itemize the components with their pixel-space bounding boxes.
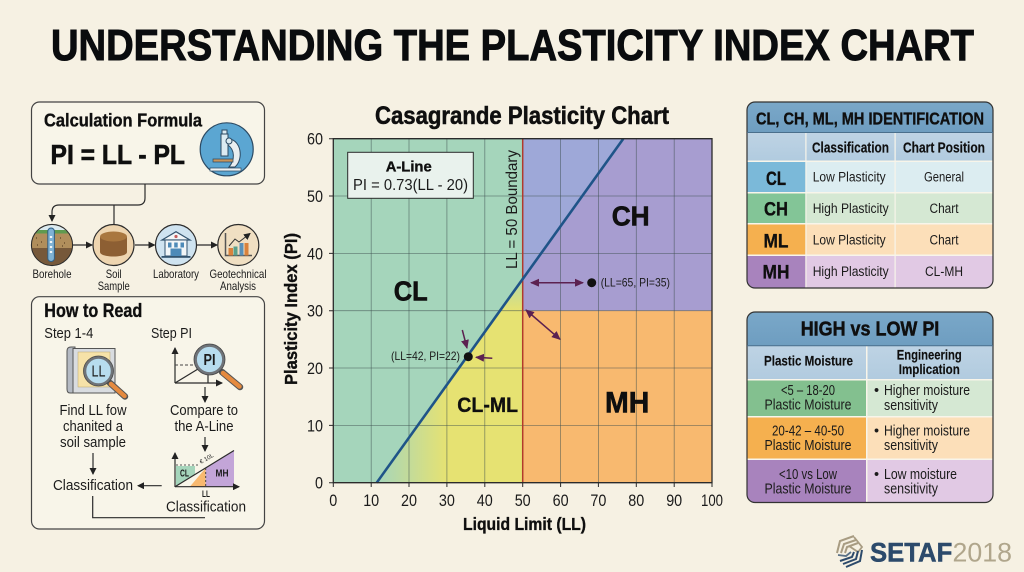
region: CH — [523, 139, 712, 311]
row labels: Plastic Moisture — [764, 481, 852, 497]
text: compare to the A-line — [170, 403, 238, 435]
row labels: 20-42 – 40-50 — [772, 424, 844, 440]
row values — [813, 170, 964, 279]
x axis ticks: 20 — [401, 492, 417, 510]
mini classification chart: CL — [180, 468, 189, 480]
mini classification chart: € 10L — [199, 453, 216, 466]
y axis ticks: 0 — [315, 475, 323, 493]
row values: Chart — [930, 201, 959, 216]
y axis ticks: 40 — [307, 245, 323, 263]
row values: Chart — [930, 232, 959, 247]
logo: SETAF 2018: 2018 — [952, 538, 1012, 568]
step labels: Geotechnical — [210, 267, 266, 281]
x axis ticks: 90 — [666, 492, 682, 510]
text: compare to the A-line: Compare to — [170, 403, 238, 419]
panel: calculation formula — [32, 102, 264, 184]
step labels — [32, 267, 266, 293]
data point: LL=65 PI=35: (LL=65, PI=35) — [601, 276, 670, 290]
step labels: Laboratory — [153, 267, 199, 281]
arrow: boundary to MH — [526, 310, 560, 339]
x axis ticks: 10 — [363, 492, 379, 510]
text: classification left: Classification — [53, 477, 133, 494]
x axis ticks: 30 — [439, 492, 455, 510]
icon: LL chart magnifier: LL — [92, 364, 106, 380]
chart title: Casagrande Plasticity Chart — [375, 102, 670, 130]
formula: PI = LL - PL — [50, 139, 185, 170]
row implications: sensitivity — [884, 438, 939, 454]
icon: PI graph magnifier — [175, 344, 240, 387]
row values: General — [924, 170, 964, 185]
row labels — [764, 383, 852, 497]
table heading: CL, CH, ML, MH IDENTIFICATION — [756, 108, 984, 128]
panel: high vs low PI table — [747, 312, 993, 503]
x axis ticks: 50 — [515, 492, 531, 510]
row values: High Plasticity — [813, 201, 889, 216]
y axis ticks — [307, 130, 333, 493]
step headings — [44, 326, 192, 342]
row labels: Plastic Moisture — [764, 438, 852, 454]
A-line — [377, 139, 623, 483]
row labels: <10 vs Low — [779, 467, 837, 483]
step labels: Analysis — [220, 279, 256, 293]
row labels — [762, 168, 790, 283]
panel: how to read — [32, 297, 264, 529]
step headings: Step PI — [151, 326, 192, 342]
row implications — [874, 383, 970, 497]
region: CL — [333, 139, 523, 483]
arrow: compare to mini chart — [204, 437, 206, 451]
text: find LL — [60, 403, 127, 451]
x axis title: Liquid Limit (LL) — [463, 514, 586, 534]
step labels: Sample — [98, 279, 130, 293]
plot frame — [333, 139, 712, 483]
text: compare to the A-line: the A-Line — [174, 419, 234, 435]
panel: identification table — [747, 102, 993, 288]
callout: A-line equation — [348, 152, 473, 198]
step labels: Borehole — [32, 267, 72, 281]
logo: SETAF 2018 — [837, 536, 1012, 568]
column headers: Chart Position — [903, 139, 985, 156]
x axis ticks — [329, 483, 723, 510]
row implications: sensitivity — [884, 481, 939, 497]
row implications: Higher moisture — [884, 424, 970, 440]
column headers: Engineering — [897, 346, 962, 362]
row labels: CL — [766, 168, 786, 190]
column headers: Classification — [812, 139, 889, 156]
table heading: HIGH vs LOW PI — [801, 318, 939, 341]
data point: LL=42 PI=22: (LL=42, PI=22) — [391, 349, 460, 363]
icon: LL chart magnifier — [67, 347, 125, 396]
icon: logo mark — [837, 536, 862, 567]
grid lines — [333, 139, 712, 482]
arrow: mini chart to classification — [138, 485, 162, 487]
row labels: CH — [764, 199, 788, 221]
text: find LL: soil sample — [60, 435, 126, 451]
row implications: • — [874, 467, 879, 483]
region: MH — [523, 311, 712, 483]
row implications: Higher moisture — [884, 383, 970, 399]
boundary line LL=50 — [522, 139, 524, 483]
region: A-line upper wedge — [523, 139, 623, 279]
column headers — [764, 346, 962, 377]
mini classification chart: MH — [216, 468, 228, 480]
x axis ticks: 100 — [701, 492, 723, 510]
heading: calculation formula: Calculation Formula — [44, 110, 203, 130]
step labels: Soil — [106, 267, 122, 281]
column headers — [812, 139, 985, 156]
icon: soil sample — [93, 224, 134, 266]
row implications: sensitivity — [884, 398, 939, 414]
row labels: ML — [764, 230, 789, 252]
process flow — [30, 224, 266, 293]
icon: microscope — [200, 123, 253, 176]
callout: A-line equation: PI = 0.73(LL - 20) — [353, 177, 468, 194]
x axis ticks: 40 — [477, 492, 493, 510]
data point: LL=42 PI=22 — [391, 330, 492, 363]
step headings: Step 1-4 — [44, 326, 93, 342]
y axis ticks: 50 — [307, 188, 323, 206]
icon: borehole — [30, 224, 74, 268]
row labels: Plastic Moisture — [764, 397, 852, 413]
row values: Low Plasticity — [813, 232, 886, 247]
icon: PI graph magnifier: PI — [204, 352, 216, 369]
icon: geotechnical analysis — [218, 224, 259, 266]
callout: A-line equation: A-Line — [386, 159, 432, 176]
logo: SETAF 2018: SETAF — [870, 538, 952, 568]
heading: how to read: How to Read — [44, 301, 142, 322]
row labels: <5 – 18-20 — [781, 383, 835, 399]
zone labels: CH — [612, 201, 650, 232]
chart: casagrande plasticity chart — [281, 102, 723, 534]
column headers: Implication — [899, 361, 960, 377]
row values: Low Plasticity — [813, 170, 886, 185]
text: find LL: Find LL fow — [60, 403, 127, 419]
text: find LL: chanited a — [63, 419, 124, 435]
row implications: • — [874, 383, 879, 399]
mini classification chart — [175, 450, 239, 500]
x axis ticks: 60 — [553, 492, 569, 510]
region: CL-ML — [377, 279, 523, 483]
arrows between steps — [73, 244, 217, 246]
row labels: MH — [762, 261, 790, 283]
mini classification chart: LL — [202, 489, 210, 500]
x axis ticks: 80 — [628, 492, 644, 510]
connector — [93, 496, 205, 518]
row implications: • — [874, 424, 879, 440]
y axis ticks: 60 — [307, 130, 323, 148]
zone labels — [394, 201, 650, 420]
y axis title: Plasticity Index (PI) — [281, 233, 301, 385]
row values: CL-MH — [925, 264, 963, 279]
y axis ticks: 10 — [307, 417, 323, 435]
arrow: formula to borehole — [52, 184, 145, 224]
text: classification right: Classification — [166, 499, 246, 516]
zone labels: CL-ML — [457, 394, 518, 417]
zone labels: CL — [394, 276, 428, 307]
y axis ticks: 20 — [307, 360, 323, 378]
zone labels: MH — [605, 387, 649, 420]
row implications: Low moisture — [884, 467, 957, 483]
arrow: PI to compare — [204, 387, 206, 402]
icon: laboratory — [156, 224, 196, 266]
column headers: Plastic Moisture — [764, 353, 853, 369]
arrow: find LL to classification — [92, 453, 94, 474]
data point: LL=65 PI=35 — [531, 276, 670, 290]
x axis ticks: 70 — [590, 492, 606, 510]
x axis ticks: 0 — [329, 492, 337, 510]
row values: High Plasticity — [813, 264, 889, 279]
boundary label: LL = 50 Boundary — [504, 150, 521, 269]
y axis ticks: 30 — [307, 303, 323, 321]
